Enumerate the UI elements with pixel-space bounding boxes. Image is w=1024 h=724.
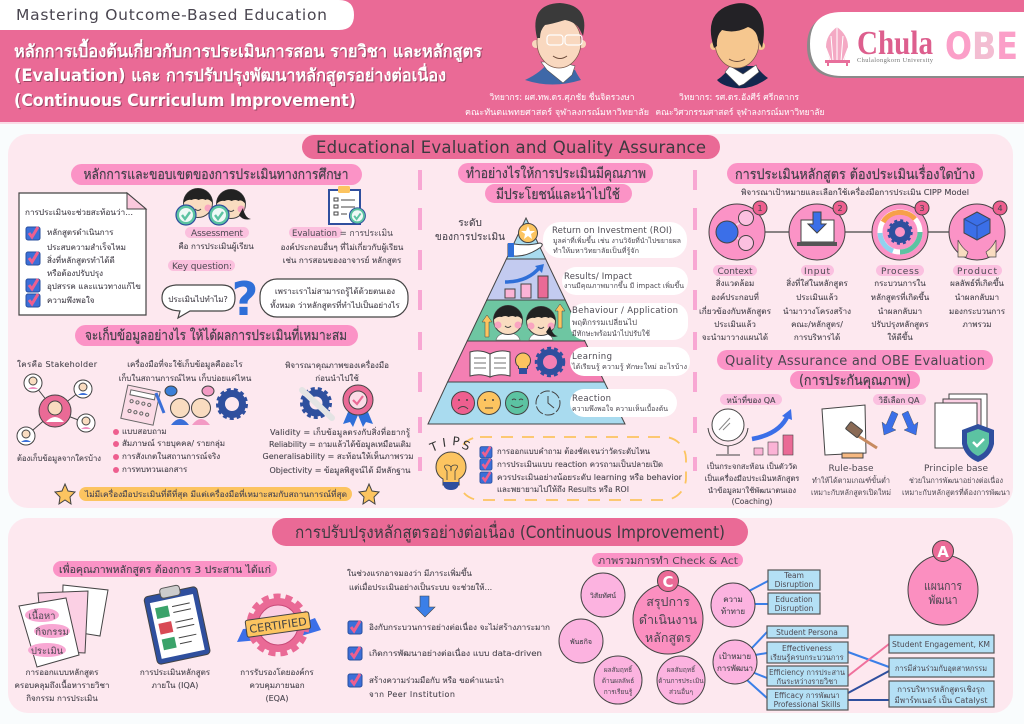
box: industry participation: การมีส่วนร่วมกับอุตสาหกรรม: [895, 664, 987, 673]
tips: ควรประเมินอย่างน้อยระดับ learning หรือ behavior: [497, 473, 683, 482]
tool list: [113, 427, 225, 474]
results label: [562, 267, 688, 295]
text: curriculum design: กิจกรรม การประเมิน: [26, 694, 98, 703]
heading: educational evaluation and quality assurance: Educational Evaluation and Quality Assurance: [316, 138, 706, 157]
CIPP: process: ให้ดีขึ้น: [887, 331, 913, 342]
QA role: (Coaching): [732, 497, 772, 506]
evaluation: เช่น การสอนของอาจารย์ หลักสูตร: [283, 255, 402, 266]
tool quality: พิจารณาคุณภาพของเครื่องมือ: [285, 359, 389, 370]
text: EQA: การรับรองโดยองค์กร: [240, 667, 314, 677]
heading: what to evaluate: [727, 163, 983, 197]
validity list: Validity = เก็บข้อมูลตรงกับสิ่งที่อยากรู้: [270, 426, 411, 438]
evaluation: [281, 227, 404, 266]
learning label: Learning: [572, 352, 612, 362]
tips: TIPS: [427, 434, 472, 455]
benefit list: อิงกับกระบวนการอย่างต่อเนื่อง จะไม่สร้างภาระมาก: [369, 621, 550, 632]
reaction label: [570, 389, 677, 417]
QA role: หน้าที่ของ QA: [726, 394, 776, 405]
assessment: [178, 227, 254, 252]
validity list: Generalisability = สะท้อนให้เห็นภาพรวม: [262, 451, 414, 461]
pyramid icons: [452, 224, 565, 415]
CIPP: process: ปรับปรุงหลักสูตร: [871, 320, 929, 330]
note: what evaluation reflects: ความพึงพอใจ: [47, 296, 95, 305]
heading: collecting data: จะเก็บข้อมูลอย่างไร ให้ได้ผลการประเมินที่เหมาะสม: [85, 326, 347, 344]
circle: C summary: หลักสูตร: [645, 630, 691, 646]
speaker captions: คณะทันตแพทยศาสตร์ จุฬาลงกรณ์มหาวิทยาลัย: [465, 107, 649, 118]
tips: การออกแบบคำถาม ต้องชัดเจนว่าวัดระดับไหน: [497, 447, 651, 456]
note: what evaluation reflects: ประสบความสำเร็จไหม: [47, 242, 126, 252]
box: education disruption: Education: [775, 595, 813, 604]
box: education disruption: Disruption: [775, 604, 814, 613]
validity list: Objectivity = ข้อมูลพิสูจน์ได้ มีหลักฐาน: [270, 465, 411, 476]
CIPP: input: 2: [837, 204, 843, 213]
CIPP: context: สิ่งแวดล้อม: [716, 277, 754, 288]
box: student engagement: [889, 635, 994, 653]
tool list: สัมภาษณ์ รายบุคคล/ รายกลุ่ม: [122, 438, 225, 448]
tool list: การสังเกตในสถานการณ์จริง: [122, 451, 220, 461]
note: what evaluation reflects: หลักสูตรดำเนินการ: [47, 228, 114, 238]
behaviour label: มีทักษะพร้อมนำไปปรับใช้: [572, 329, 650, 338]
box: proactive curriculum management: [889, 681, 994, 707]
heading: how to make evaluation useful: ทำอย่างไรให้การประเมินมีคุณภาพ: [466, 165, 646, 182]
text: curriculum design: ครอบคลุมถึงเนื้อหารายวิชา: [14, 679, 110, 690]
stakeholder: ใครคือ Stakeholder: [17, 360, 98, 369]
QA selection: [873, 394, 926, 435]
heading: quality assurance: [717, 350, 993, 389]
QA role: นำข้อมูลมาใช้พัฒนาตนเอง: [708, 486, 796, 495]
pyramid label: [435, 218, 505, 243]
CIPP: product: ภาพรวม: [962, 320, 992, 329]
behaviour label: [570, 303, 688, 340]
benefit list: สร้างความร่วมมือกับ หรือ ขอคำแนะนำ: [369, 676, 504, 685]
logo panel: Chulalongkorn University: [857, 57, 934, 64]
circles: check: ด้านการประเมิน: [658, 677, 704, 685]
heading: continuous improvement: การปรับปรุงหลักสูตรอย่างต่อเนื่อง (Continuous Improvement): [295, 520, 725, 543]
CIPP: process: นำผลกลับมา: [878, 307, 922, 316]
circles: check: การเรียนรู้: [604, 688, 633, 696]
validity list: Reliability = ถามแล้วได้ข้อมูลเหมือนเดิม: [269, 440, 411, 450]
box: efficiency: [767, 666, 848, 686]
text: IQA: [140, 668, 211, 690]
heading: how to make evaluation useful: มีประโยชน์และนำไปใช้: [496, 186, 620, 203]
ROI label: [543, 222, 687, 258]
CIPP: input: คณะ/หลักสูตร/: [791, 320, 843, 330]
callout: no best tool: [79, 487, 352, 501]
assessment: Assessment: [191, 229, 243, 239]
box: proactive curriculum management: การบริหารหลักสูตรเชิงรุก: [897, 685, 985, 695]
icon: curriculum documents: ประเมิน: [31, 646, 64, 657]
icon: students: [176, 188, 251, 225]
tips: และพยายามไปให้ถึง Results หรือ ROI: [497, 485, 629, 494]
heading: continuous improvement: [272, 518, 748, 546]
circle: development goals: เป้าหมาย: [719, 652, 751, 661]
CIPP: input: สิ่งที่ใส่ในหลักสูตร: [786, 277, 849, 289]
box: efficacy: Professional Skills: [774, 700, 840, 709]
circle: C summary: สรุปการ: [646, 594, 690, 610]
circle: A development plan: A: [937, 543, 949, 561]
CIPP: context: จะนำมาวางแผนได้: [702, 333, 768, 342]
rule-base: เหมาะกับหลักสูตรเปิดใหม่: [811, 488, 891, 497]
learning label: ได้เรียนรู้ ความรู้ ทักษะใหม่ อะไรบ้าง: [571, 362, 687, 371]
box: efficiency: Efficiency การประสาน: [769, 668, 845, 677]
CIPP: input: Input: [804, 267, 830, 277]
text: curriculum design: การออกแบบหลักสูตร: [26, 668, 99, 678]
principle base: ช่วยในการพัฒนาอย่างต่อเนื่อง: [909, 475, 1003, 485]
text: early perception: [347, 567, 492, 592]
box: effectiveness: [767, 642, 848, 663]
subheading: 3 collaborations: เพื่อคุณภาพหลักสูตร ต้องการ 3 ประสาน ได้แก่: [59, 562, 271, 576]
speech bubble: because: เพราะเราไม่สามารถรู้ได้ด้วยตนเอง: [275, 287, 395, 297]
main title: หลักการเบื้องต้นเกี่ยวกับการประเมินการสอน รายวิชา และหลักสูตร: [14, 38, 483, 63]
tools: [119, 358, 252, 425]
header pill: series name: Mastering Outcome-Based Education: [16, 6, 327, 24]
validity list: [262, 426, 414, 476]
heading: collecting data: [75, 325, 358, 346]
reaction label: Reaction: [572, 394, 611, 404]
note: what evaluation reflects: สิ่งที่หลักสูตรทำได้ดี: [47, 254, 115, 266]
box: student persona: Student Persona: [776, 628, 838, 637]
heading: principles: หลักการและขอบเขตของการประเมินทางการศึกษา: [84, 167, 348, 183]
principle base: [902, 394, 1010, 497]
CIPP: context: 1: [757, 204, 763, 213]
note: what evaluation reflects: หรือต้องปรับปรุง: [47, 269, 103, 278]
CIPP: context: [699, 201, 772, 342]
connectors: [747, 581, 889, 700]
icon: stars: [55, 484, 379, 504]
CIPP: product: นำผลกลับมา: [955, 293, 999, 302]
heading: what to evaluate: พิจารณาเป้าหมายและเลือกใช้เครื่องมือการประเมิน CIPP Model: [741, 186, 969, 197]
circle: A development plan: [908, 540, 978, 625]
note: what evaluation reflects: การประเมินจะช่วยสะท้อนว่า...: [25, 208, 133, 217]
results label: Results/ Impact: [564, 272, 633, 282]
CIPP: context: เกี่ยวข้องกับหลักสูตร: [699, 305, 772, 317]
behaviour label: พฤติกรรมเปลี่ยนไป: [572, 317, 637, 327]
box: student engagement: Student Engagement, KM: [892, 640, 990, 649]
CIPP: product: ผลลัพธ์ที่เกิดขึ้น: [950, 277, 1004, 288]
heading: quality assurance: (การประกันคุณภาพ): [799, 373, 911, 389]
circle: C summary: [633, 570, 703, 654]
speaker captions: [465, 91, 825, 118]
CIPP: product: [949, 201, 1007, 329]
key question: Key question:: [172, 262, 232, 272]
circles: check: ผลสัมฤทธิ์: [667, 665, 696, 674]
CIPP: input: การบริหารได้: [794, 333, 840, 342]
assessment: คือ การประเมินผู้เรียน: [178, 242, 254, 252]
subheading: check and act: [592, 553, 743, 567]
panel: educational evaluation: [8, 134, 1013, 508]
logo panel: OBE: [945, 25, 1018, 68]
main title: (Evaluation) และ การปรับปรุงพัฒนาหลักสูตรอย่างต่อเนื่อง: [14, 63, 446, 87]
circles: check: ส่วนอื่นๆ: [669, 687, 693, 696]
box: proactive curriculum management: มีพาร์ทเนอร์ เป็น Catalyst: [894, 695, 988, 705]
note: what evaluation reflects: อุปสรรค และแนวทางแก้ไข: [47, 282, 141, 291]
icon: certified badge: [237, 596, 321, 654]
stakeholder: [17, 360, 101, 464]
benefit list: เกิดการพัฒนาอย่างต่อเนื่อง แบบ data-driven: [369, 647, 542, 658]
pyramid label: ของการประเมิน: [435, 232, 505, 243]
circle: challenge: ท้าทาย: [721, 607, 745, 616]
box: industry participation: [889, 658, 994, 677]
box: team disruption: Team: [783, 571, 804, 580]
speech bubble: because: ทั้งหมด ว่าหลักสูตรที่ทำไปเป็นอย่างไร: [270, 299, 400, 311]
box: team disruption: Disruption: [775, 580, 814, 589]
pyramid label: ระดับ: [458, 218, 482, 229]
CIPP: input: นำมาวางโครงสร้าง: [783, 306, 851, 316]
tips: [427, 434, 686, 500]
CIPP: input: [783, 201, 851, 342]
main title: [14, 38, 483, 111]
QA role: เป็นเครื่องมือประเมินหลักสูตร: [705, 473, 799, 483]
evaluation: Evaluation = การประเมิน: [292, 228, 393, 239]
arrow down: [415, 596, 435, 617]
ROI label: ทำให้มหาวิทยาลัยเป็นที่รู้จัก: [553, 246, 639, 255]
ROI label: Return on Investment (ROI): [552, 226, 672, 236]
pyramid: [428, 218, 625, 424]
text: IQA: การประเมินหลักสูตร: [140, 668, 211, 678]
circle: development goals: การพัฒนา: [717, 664, 753, 673]
box: education disruption: [768, 593, 820, 614]
circle: C summary: C: [662, 573, 674, 591]
text: early perception: ในช่วงแรกอาจมองว่า มีภาระเพิ่มขึ้น: [347, 567, 472, 578]
circle: A development plan: แผนการ: [924, 579, 962, 593]
CIPP: product: มองกระบวนการ: [949, 307, 1006, 316]
subheading: check and act: ภาพรวมการทำ Check & Act: [598, 556, 738, 567]
tool quality: [285, 359, 389, 427]
QA selection: วิธีเลือก QA: [878, 396, 920, 405]
speech bubble: why evaluate: ประเมินไปทำไม?: [168, 295, 228, 304]
speaker 2 portrait: [710, 3, 768, 88]
logo panel: [807, 12, 1024, 78]
CIPP: context: ประเมินแล้ว: [714, 320, 756, 329]
box: effectiveness: เรียนรู้ครบกระบวนการ: [770, 653, 844, 662]
icon: IQA clipboard: [142, 581, 211, 665]
box: efficacy: Efficacy การพัฒนา: [774, 691, 840, 700]
rule-base: ทำให้ได้ตามเกณฑ์ขั้นต่ำ: [812, 475, 890, 485]
CIPP: context: Context: [718, 267, 753, 277]
tools: เครื่องมือที่จะใช้เก็บข้อมูลคืออะไร: [127, 358, 243, 370]
principle base: เหมาะกับหลักสูตรที่ต้องการพัฒนา: [902, 487, 1010, 497]
CIPP: product: Product: [957, 267, 997, 277]
benefit list: จาก Peer Institution: [369, 690, 455, 699]
tool list: การทบทวนเอกสาร: [122, 465, 188, 474]
circles: check: [559, 573, 705, 704]
speech bubble: why evaluate: [162, 285, 235, 318]
speaker 1 portrait: [525, 3, 586, 84]
speaker captions: วิทยากร: รศ.ดร.อังศีร์ ศรีกตากร: [679, 92, 799, 103]
ROI label: มูลค่าที่เพิ่มขึ้น เช่น งานวิจัยที่นำไปขยายผล: [553, 234, 681, 245]
box: student persona: [767, 626, 848, 638]
text: curriculum design: [14, 668, 110, 703]
circle: challenge: ความ: [723, 595, 743, 604]
CIPP: process: หลักสูตรที่เกิดขึ้น: [871, 291, 930, 303]
CIPP: product: 4: [997, 204, 1003, 213]
speaker captions: วิทยากร: ผศ.ทพ.ดร.ศุภชัย ชื่นจิตรวงษา: [489, 91, 634, 103]
text: IQA: ภายใน (IQA): [152, 681, 198, 690]
CIPP: input: ประเมินแล้ว: [796, 293, 838, 302]
benefit list: [348, 621, 550, 699]
reaction label: ความพึงพอใจ ความเห็นเบื้องต้น: [572, 402, 668, 413]
results label: งานมีคุณภาพมากขึ้น มี impact เพิ่มขึ้น: [564, 279, 684, 290]
tool list: แบบสอบถาม: [122, 427, 167, 436]
QA role: [705, 394, 799, 506]
text: EQA: ควบคุมภายนอก: [249, 681, 305, 690]
circles: check: ผลสัมฤทธิ์: [604, 665, 633, 674]
stakeholder: ต้องเก็บข้อมูลจากใครบ้าง: [17, 453, 101, 464]
CIPP connector: [737, 231, 977, 233]
heading: principles: [71, 164, 362, 185]
CIPP: context: องค์ประกอบที่: [711, 291, 759, 302]
tips: การประเมินแบบ reaction ควรถามเป็นปลายเปิด: [497, 459, 663, 469]
circle: C summary: ดำเนินงาน: [639, 612, 698, 627]
icon: curriculum documents: เนื้อหา: [28, 609, 56, 622]
icon: clipboard: [329, 186, 365, 224]
text: EQA: [240, 667, 314, 703]
circles: check: พันธกิจ: [570, 638, 592, 646]
callout: no best tool: ไม่มีเครื่องมือประเมินที่ดีที่สุด มีแต่เครื่องมือที่เหมาะสมกับสถานการณ์ที่สุด: [84, 488, 347, 499]
principle base: Principle base: [924, 464, 988, 474]
circle: development goals: [713, 640, 757, 684]
heading: quality assurance: Quality Assurance and OBE Evaluation: [725, 354, 985, 369]
CIPP: process: 3: [919, 204, 925, 213]
box: efficacy: [767, 689, 848, 710]
speech bubble: because: [260, 279, 408, 317]
CIPP: process: Process: [881, 267, 919, 277]
evaluation: องค์ประกอบอื่นๆ ที่ไม่เกี่ยวกับผู้เรียน: [281, 241, 404, 253]
subheading: 3 collaborations: [53, 561, 277, 577]
icon: curriculum documents: กิจกรรม: [35, 627, 69, 638]
speaker captions: คณะวิศวกรรมศาสตร์ จุฬาลงกรณ์มหาวิทยาลัย: [656, 107, 825, 118]
box: efficiency: กันระหว่างรายวิชา: [777, 677, 837, 686]
heading: how to make evaluation useful: [458, 163, 653, 203]
circles: check: ด้านผลลัพธ์: [602, 677, 634, 685]
CIPP: process: [871, 201, 930, 342]
box: effectiveness: Effectiveness: [782, 644, 832, 653]
learning label: [570, 347, 690, 376]
icon: curriculum documents: [19, 585, 108, 667]
tools: เก็บในสถานการณ์ไหน เก็บบ่อยแค่ไหน: [119, 373, 252, 383]
heading: what to evaluate: การประเมินหลักสูตร ต้องประเมินเรื่องใดบ้าง: [735, 165, 975, 183]
icon: question mark: ?: [232, 272, 258, 326]
behaviour label: Behaviour / Application: [572, 306, 678, 316]
circle: A development plan: พัฒนา: [928, 593, 958, 607]
logo panel: Chula: [857, 25, 933, 62]
text: EQA: (EQA): [265, 694, 289, 703]
header pill: series name: [0, 0, 354, 30]
header band: [0, 0, 1024, 124]
CIPP: process: กระบวนการใน: [874, 279, 926, 288]
rule-base: Rule-base: [828, 464, 874, 474]
main title: (Continuous Curriculum Improvement): [14, 91, 356, 111]
tool quality: ก่อนนำไปใช้: [315, 374, 359, 383]
icon: certified badge: CERTIFIED: [248, 615, 308, 636]
QA role: เป็นกระจกสะท้อน เป็นตัววัด: [707, 461, 797, 471]
circles: check: วิสัยทัศน์: [590, 592, 616, 600]
rule-base: [811, 405, 891, 497]
panel: continuous improvement: [8, 518, 1013, 713]
text: early perception: แต่เมื่อประเมินอย่างเป็นระบบ จะช่วยให้...: [349, 581, 492, 592]
note: what evaluation reflects: [19, 193, 146, 315]
box: team disruption: [768, 570, 820, 590]
circle: challenge: [711, 583, 755, 627]
